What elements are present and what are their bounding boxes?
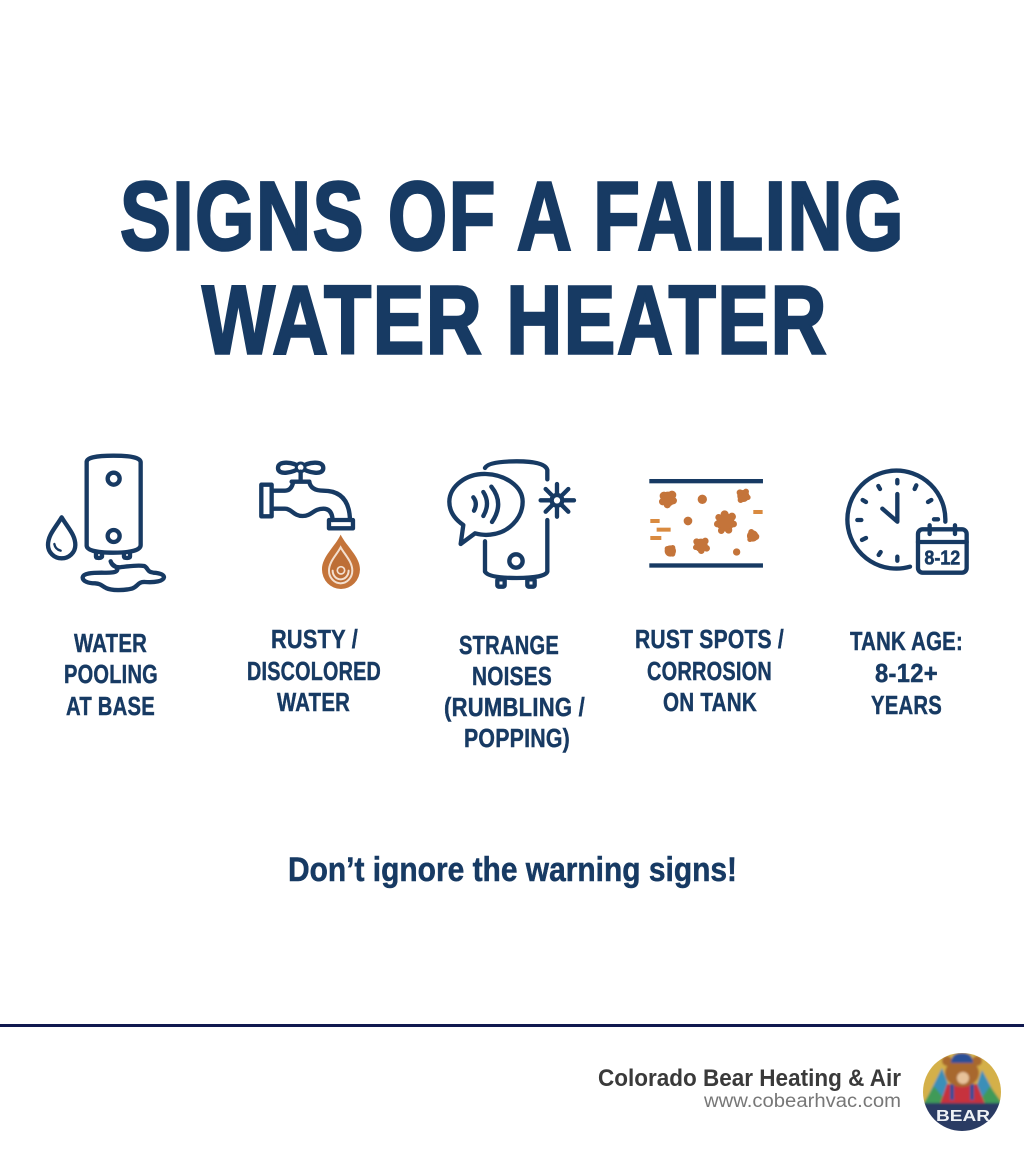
icon detail: rust drop (322, 535, 360, 589)
label: water pooling at base: POOLING (64, 659, 158, 689)
label: rust spots: ON TANK (663, 687, 757, 717)
label: strange noises: POPPING) (464, 723, 570, 753)
label: strange noises: STRANGE (459, 630, 559, 660)
label: strange noises: (RUMBLING / (444, 692, 585, 722)
label: water pooling at base: WATER (74, 628, 147, 658)
icon: rust spots on tank wall (649, 479, 763, 568)
logo: BEAR (936, 1108, 991, 1125)
label: water pooling at base: AT BASE (66, 691, 155, 721)
footer website: www.cobearhvac.com (703, 1091, 901, 1112)
label: tank age (850, 626, 963, 720)
label: strange noises (444, 630, 585, 753)
label: rusty discolored water: WATER (277, 687, 350, 717)
label: rust spots: CORROSION (647, 656, 772, 686)
icon: noisy water heater with speech bubble (449, 461, 574, 587)
footer divider (0, 1024, 1024, 1027)
label: rust spots: RUST SPOTS / (635, 624, 784, 654)
icon: clock with calendar (847, 471, 967, 573)
label: tank age: TANK AGE: (850, 626, 963, 656)
logo (923, 1053, 1001, 1131)
label: rust spots (635, 624, 784, 717)
label: tank age: 8-12+ (875, 658, 938, 688)
tagline: Don’t ignore the warning signs! (288, 851, 737, 889)
icon: water heater with puddle (48, 456, 164, 590)
label: rusty discolored water: DISCOLORED (247, 656, 381, 686)
label: strange noises: NOISES (472, 661, 552, 691)
title (120, 162, 905, 374)
label: tank age: YEARS (871, 690, 942, 720)
title: WATER HEATER (202, 266, 828, 374)
icon: clock with calendar: 8-12 (924, 547, 960, 569)
footer company name: Colorado Bear Heating & Air (598, 1065, 901, 1092)
label: rusty discolored water (247, 624, 381, 717)
label: rusty discolored water: RUSTY / (271, 624, 358, 654)
label: water pooling at base (64, 628, 158, 721)
icon: faucet with rusty drop (261, 463, 360, 589)
